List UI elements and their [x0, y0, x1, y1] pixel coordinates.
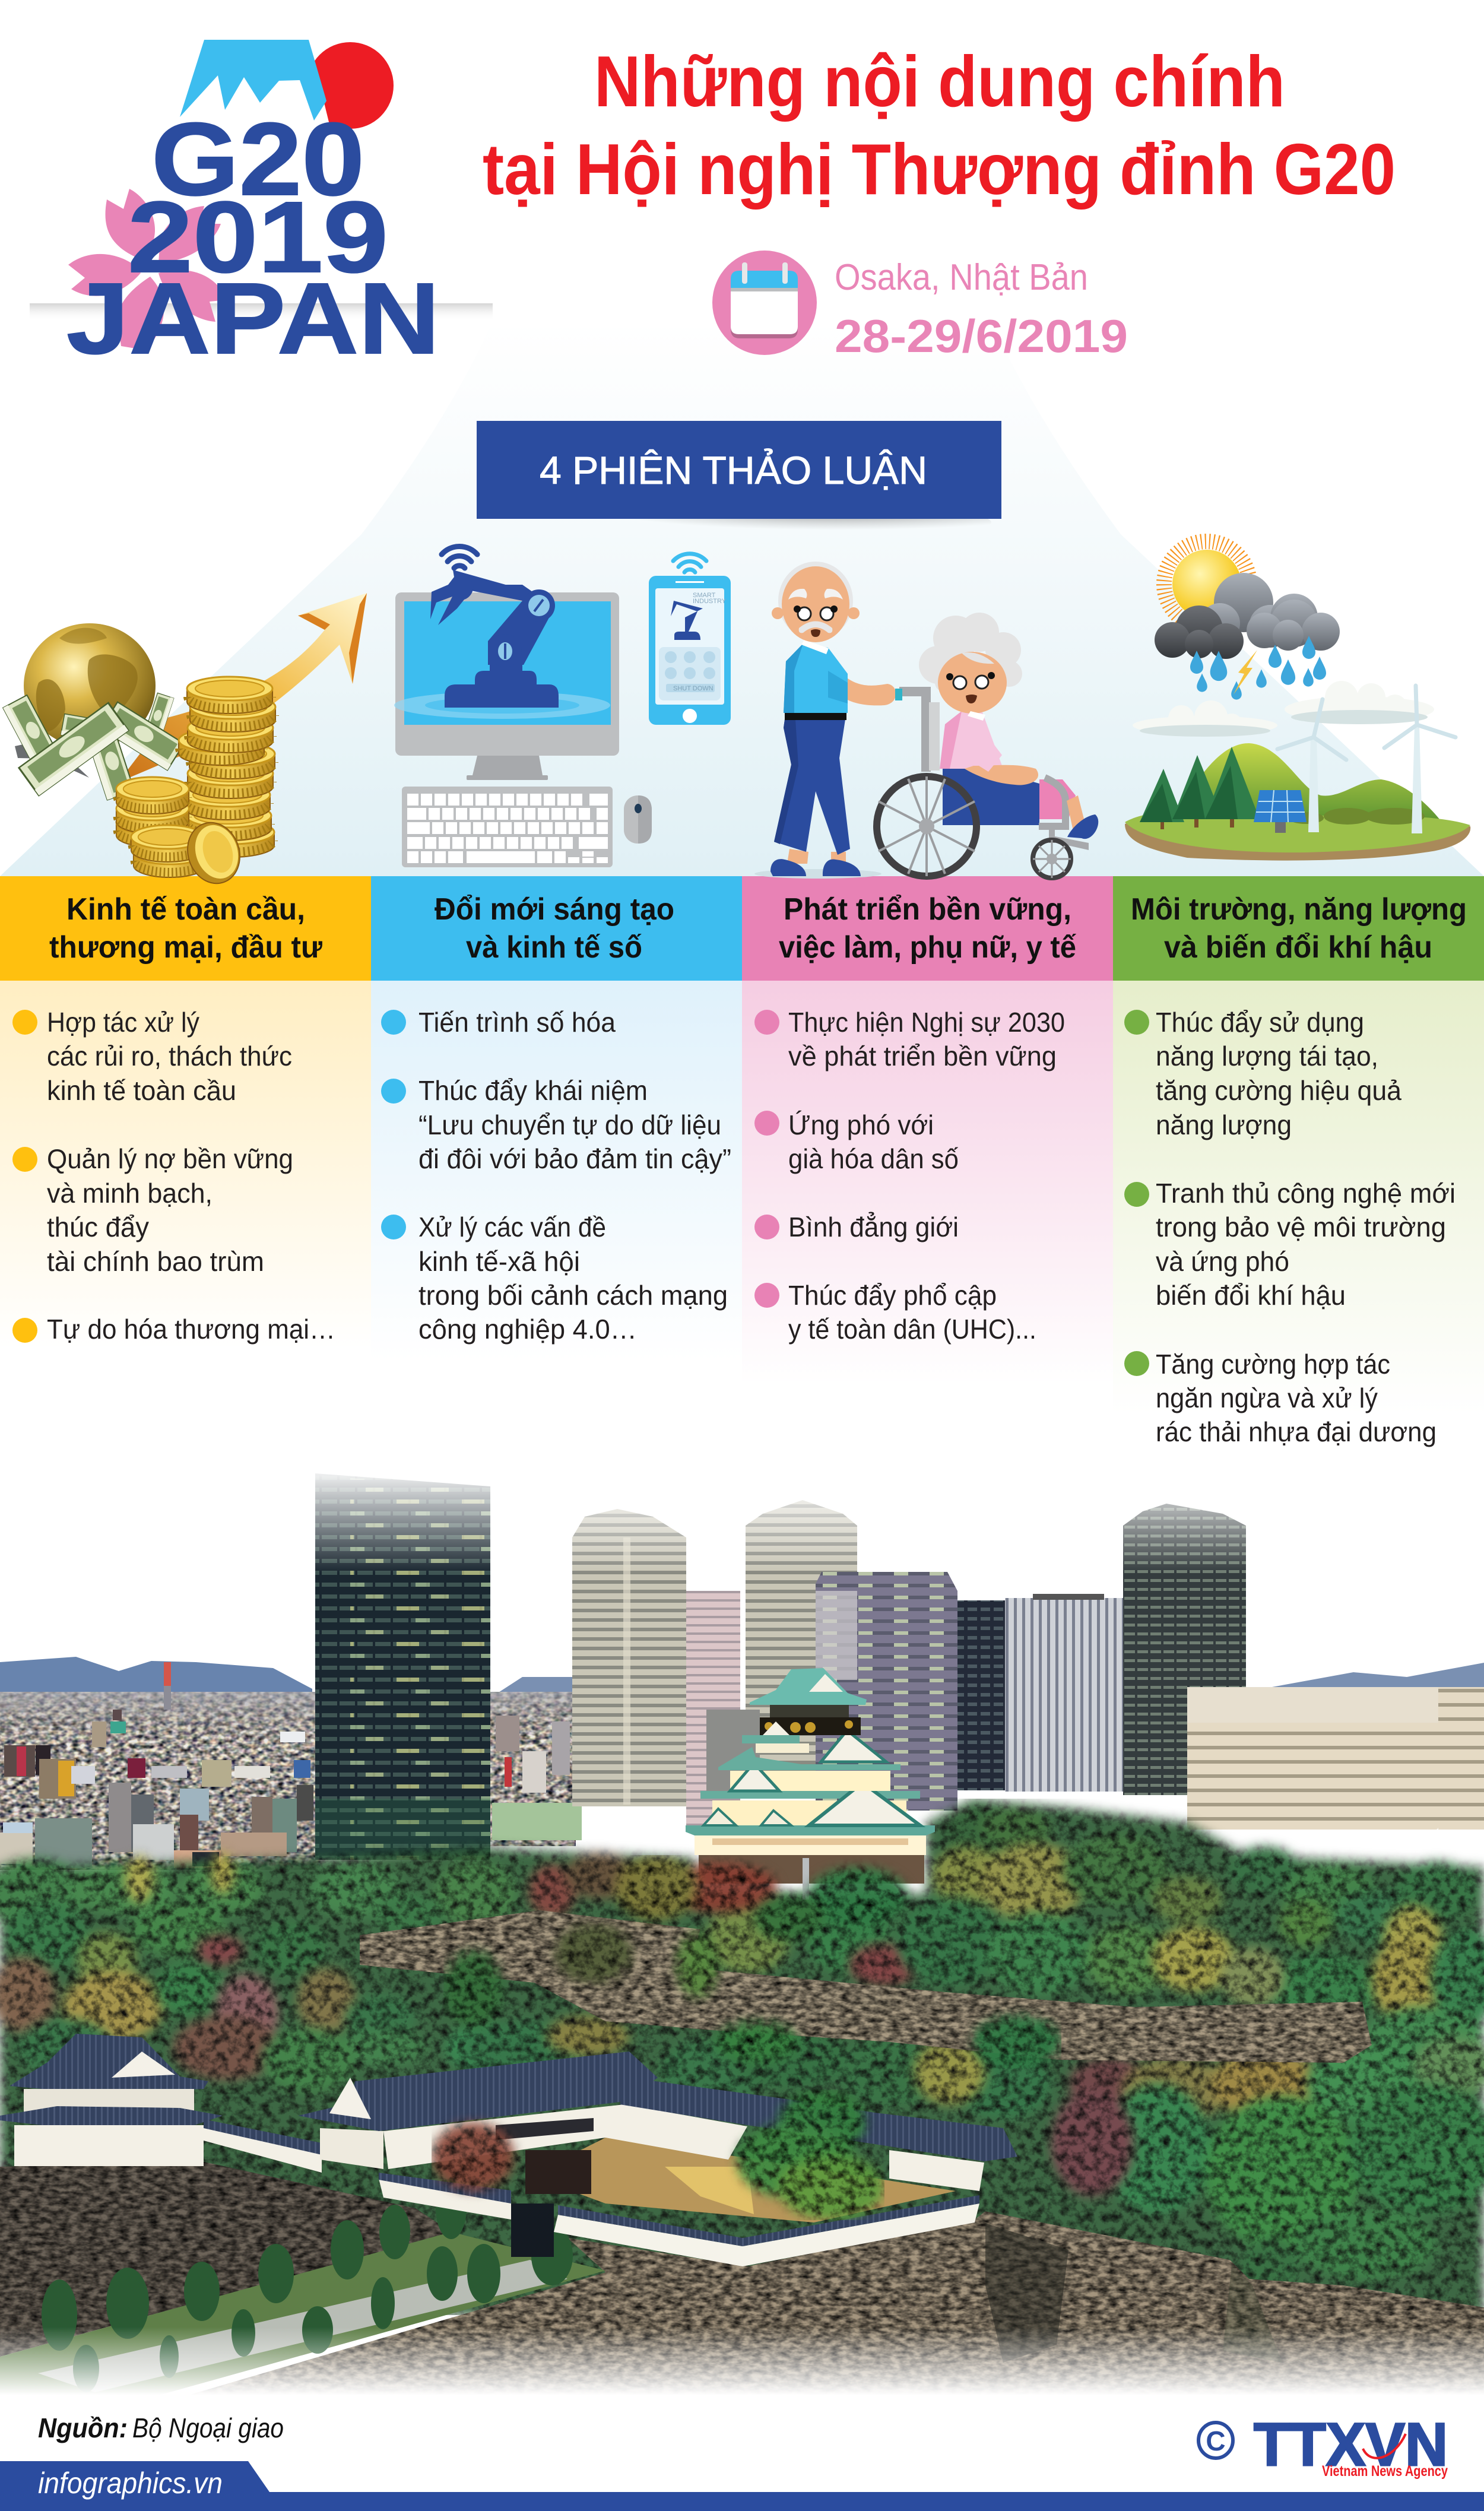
stone wall upper	[360, 1910, 1372, 2063]
heading: global economy	[49, 892, 322, 965]
bullet list: innovation: Xử lý các vấn đề	[418, 1212, 606, 1242]
title	[483, 41, 1396, 210]
bullet list: sustainable development: y tế toàn dân (UHC)...	[788, 1314, 1036, 1345]
bullet list: environment	[1124, 1007, 1456, 1447]
logo: G20 2019 Japan	[28, 40, 493, 375]
main castle keep	[686, 1668, 935, 1900]
corner turret	[0, 2034, 322, 2173]
bullet list: sustainable development: Bình đẳng giới	[788, 1212, 959, 1242]
illustration: elderly couple with wheelchair	[754, 562, 1098, 879]
bullet list: innovation: Thúc đẩy khái niệm	[418, 1075, 648, 1106]
heading: environment: và biến đổi khí hậu	[1164, 930, 1432, 965]
bullet list: environment: Thúc đẩy sử dụng	[1156, 1007, 1364, 1038]
bullet list: environment: tăng cường hiệu quả	[1156, 1075, 1401, 1106]
heading: global economy: Kinh tế toàn cầu,	[66, 892, 305, 927]
bullet list: innovation: công nghiệp 4.0…	[418, 1314, 637, 1345]
footer bar: infographics.vn	[38, 2466, 223, 2500]
bullet list: global economy: Tự do hóa thương mại…	[47, 1314, 335, 1345]
illustration: smartphone: SMART	[693, 592, 716, 599]
bullet list: environment: năng lượng tái tạo,	[1156, 1041, 1378, 1071]
photo: Osaka skyline and castle	[0, 1466, 1484, 2401]
bullet list: innovation: trong bối cảnh cách mạng	[418, 1280, 728, 1311]
panel: global economy, trade and investment	[0, 876, 371, 1349]
panel: environment, energy and climate	[1113, 876, 1484, 1447]
background mountain	[0, 321, 1484, 876]
bullet list: environment: ngăn ngừa và xử lý	[1156, 1383, 1378, 1413]
foreground trees	[443, 1855, 1061, 2069]
bullet list: global economy: và minh bạch,	[47, 1178, 213, 1209]
source note	[38, 2412, 284, 2443]
bullet list: innovation: “Lưu chuyển tự do dữ liệu	[418, 1109, 721, 1140]
bottom fade	[0, 2327, 1484, 2401]
bullet list: global economy: Hợp tác xử lý	[47, 1007, 199, 1038]
title: Những nội dung chính	[594, 41, 1285, 122]
bullet list: global economy	[12, 1007, 335, 1345]
bullet list: environment: biến đổi khí hậu	[1156, 1280, 1346, 1311]
gate complex	[298, 2052, 1017, 2266]
bullet list: global economy: các rủi ro, thách thức	[47, 1041, 292, 1071]
foliage background	[0, 1799, 1484, 2315]
heading: 4 discussion sessions: 4 PHIÊN THẢO LUẬN	[540, 448, 927, 492]
grass and road	[0, 2232, 605, 2398]
bullet list: innovation: kinh tế-xã hội	[418, 1246, 580, 1277]
bullet list: environment: rác thải nhựa đại dương	[1156, 1416, 1437, 1447]
heading: environment	[1131, 892, 1467, 965]
location: Osaka, Nhật Bản	[835, 257, 1088, 298]
bullet list: sustainable development	[754, 1007, 1065, 1345]
bullet list: environment: trong bảo vệ môi trường	[1156, 1212, 1446, 1242]
logo: TTXVN: TTXVN	[1254, 2411, 1448, 2478]
bullet list: innovation	[381, 1007, 731, 1345]
panel: innovation and digital economy	[371, 876, 742, 1361]
bullet list: global economy: kinh tế toàn cầu	[47, 1075, 236, 1106]
bullet list: sustainable development: Thúc đẩy phổ cập	[788, 1280, 997, 1311]
heading: sustainable development	[779, 892, 1076, 965]
logo: G20 2019 Japan: G20	[151, 101, 364, 217]
bullet list: environment: Tăng cường hợp tác	[1156, 1349, 1390, 1380]
bullet list: innovation: đi đôi với bảo đảm tin cậy”	[418, 1143, 731, 1174]
logo: G20 2019 Japan: JAPAN	[66, 262, 440, 375]
bullet list: sustainable development: về phát triển bền vững	[788, 1041, 1057, 1071]
bullet list: environment: và ứng phó	[1156, 1246, 1289, 1277]
icon: calendar	[712, 251, 817, 355]
heading: sustainable development: việc làm, phụ nữ, y tế	[779, 930, 1076, 965]
panel: sustainable development	[742, 876, 1113, 1384]
illustration: smartphone	[649, 554, 731, 725]
courtyard trees	[432, 2090, 884, 2220]
bullet list: environment: Tranh thủ công nghệ mới	[1156, 1178, 1456, 1209]
logo: TTXVN: Vietnam News Agency	[1322, 2463, 1448, 2480]
bullet list: sustainable development: già hóa dân số	[788, 1143, 959, 1174]
logo: TTXVN: C	[1206, 2426, 1226, 2456]
bullet list: sustainable development: Thực hiện Nghị sự 2030	[788, 1007, 1065, 1038]
heading: 4 discussion sessions	[477, 421, 1001, 541]
illustration: computer with robot arm	[394, 546, 652, 867]
date: 28-29/6/2019	[835, 310, 1128, 362]
footer bar	[0, 2461, 1484, 2511]
bullet list: sustainable development: Ứng phó với	[788, 1109, 934, 1140]
bullet list: innovation: Tiến trình số hóa	[418, 1007, 616, 1038]
heading: innovation	[435, 892, 674, 965]
source note: Nguồn:	[38, 2412, 128, 2443]
heading: innovation: và kinh tế số	[466, 930, 642, 965]
heading: environment: Môi trường, năng lượng	[1131, 892, 1467, 927]
bullet list: global economy: tài chính bao trùm	[47, 1246, 264, 1277]
city blocks	[0, 1662, 582, 1868]
illustration: smartphone: SHUT DOWN	[673, 685, 714, 692]
bullet list: global economy: thúc đẩy	[47, 1212, 149, 1242]
source note: Bộ Ngoại giao	[132, 2412, 284, 2443]
stone walls lower	[0, 2161, 1484, 2398]
heading: global economy: thương mại, đầu tư	[49, 930, 322, 965]
title: tại Hội nghị Thượng đỉnh G20	[483, 129, 1396, 210]
illustration: climate and renewable energy island	[1125, 541, 1470, 861]
illustration: smartphone: INDUSTRY	[693, 598, 727, 605]
heading: sustainable development: Phát triển bền vững,	[784, 892, 1071, 927]
illustration: globe, money and coins	[3, 593, 367, 890]
heading: innovation: Đổi mới sáng tạo	[435, 892, 674, 927]
logo: G20 2019 Japan: 2019	[128, 181, 388, 294]
bullet list: global economy: Quản lý nợ bền vững	[47, 1143, 293, 1174]
bullet list: environment: năng lượng	[1156, 1109, 1292, 1140]
small trees	[42, 2177, 573, 2392]
